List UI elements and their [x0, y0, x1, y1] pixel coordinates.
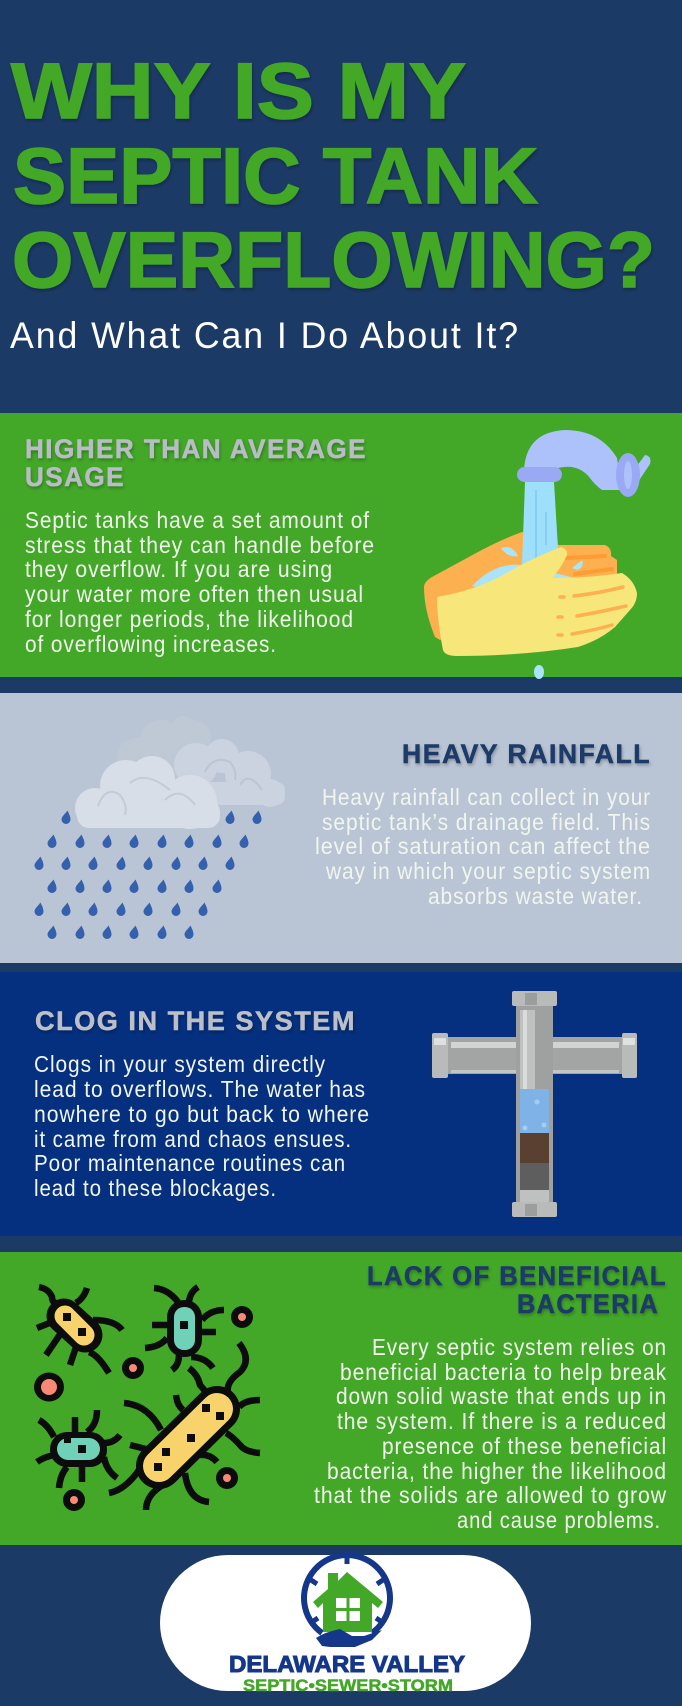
text: rainfall description — [315, 784, 651, 909]
text: usage description: Septic tanks have a set amount of — [25, 507, 370, 533]
heading: higher than average usage: USAGE — [25, 462, 125, 492]
text: bacteria description — [314, 1334, 667, 1533]
icon: spores — [34, 1306, 253, 1511]
icon: rain clouds — [75, 716, 285, 829]
heading: lack of beneficial bacteria — [367, 1261, 667, 1319]
heading: heavy rainfall: HEAVY RAINFALL — [402, 739, 651, 769]
heading: higher than average usage — [25, 434, 367, 492]
icon: bacterium top left — [37, 1287, 122, 1373]
title: OVERFLOWING? — [12, 215, 655, 304]
text: clog description: nowhere to go but back to where — [34, 1101, 370, 1127]
text: usage description: your water more often then usual — [25, 581, 364, 607]
panel: logo badge — [160, 1555, 531, 1695]
title — [11, 46, 655, 304]
panel: clog in the system — [0, 972, 682, 1236]
icon: rain drops — [34, 810, 262, 939]
icon: bacterium bottom left — [37, 1410, 120, 1488]
heading: lack of beneficial bacteria: BACTERIA — [517, 1289, 659, 1319]
text: usage description: they overflow. If you are using — [25, 556, 333, 582]
icon: clogged pipe — [432, 991, 637, 1217]
heading: lack of beneficial bacteria: LACK OF BENEFICIAL — [367, 1261, 667, 1291]
text: clog description: Poor maintenance routines can — [34, 1150, 346, 1176]
text: rainfall description: way in which your septic system — [325, 858, 651, 884]
heading: clog in the system: CLOG IN THE SYSTEM — [35, 1006, 356, 1036]
text: company name: DELAWARE VALLEY — [229, 1651, 465, 1677]
panel: heavy rainfall — [0, 693, 682, 963]
subtitle: And What Can I Do About It? — [10, 315, 520, 356]
icon: bacterium top middle — [145, 1287, 224, 1370]
text: rainfall description: Heavy rainfall can collect in your — [322, 784, 651, 810]
icon: hands under faucet — [424, 430, 650, 679]
title: WHY IS MY — [11, 46, 466, 135]
text: rainfall description: absorbs waste water. — [428, 883, 643, 909]
text: clog description: lead to these blockages. — [34, 1175, 277, 1201]
text: usage description: stress that they can handle before — [25, 532, 375, 558]
text: clog description: it came from and chaos ensues. — [34, 1126, 352, 1152]
icon: large bacterium — [109, 1343, 260, 1510]
text: clog description: lead to overflows. The water has — [34, 1076, 366, 1102]
heading: higher than average usage: HIGHER THAN AVERAGE — [25, 434, 367, 464]
title: SEPTIC TANK — [13, 131, 538, 220]
text: company services: SEPTIC•SEWER•STORM — [243, 1676, 453, 1695]
text: rainfall description: level of saturation can affect the — [315, 833, 651, 859]
text: usage description — [25, 507, 375, 657]
icon: house and pipe ring logo — [304, 1555, 390, 1647]
text: clog description: Clogs in your system directly — [34, 1051, 326, 1077]
text: usage description: for longer periods, the likelihood — [25, 606, 354, 632]
panel: lack of beneficial bacteria — [0, 1252, 682, 1545]
text: usage description: of overflowing increases. — [25, 631, 277, 657]
panel: higher than average usage — [0, 413, 682, 679]
text: rainfall description: septic tank’s drainage field. This — [322, 809, 651, 835]
text: clog description — [34, 1051, 370, 1201]
